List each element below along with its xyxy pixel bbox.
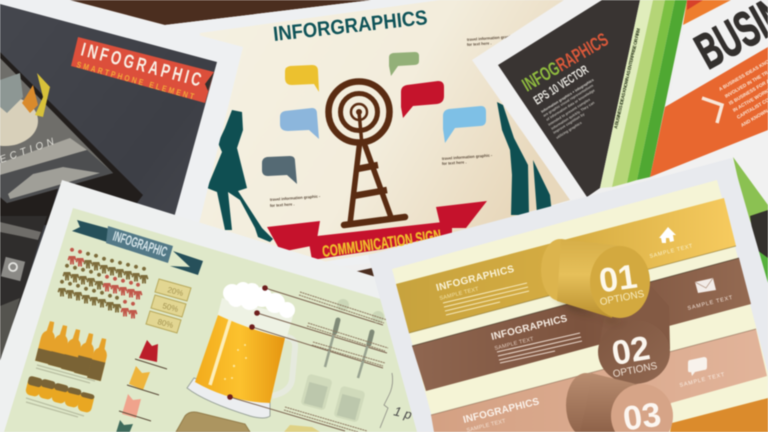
ghost taps and mugs: [300, 299, 384, 423]
panel: dark infographics vector: [472, 0, 687, 200]
callout lines: [230, 288, 387, 431]
band: brown: SAMPLE TEXT: [687, 295, 734, 312]
body text: utilizing graphics: [555, 121, 583, 140]
green corner: [733, 157, 768, 260]
small text blocks: for text here .: [270, 201, 295, 208]
label: collection: ECTION: [0, 135, 59, 166]
mug handle: [272, 337, 295, 396]
body text: information quickly. They can: [550, 101, 595, 131]
brown coaster: [176, 412, 250, 432]
beer mug: [187, 282, 387, 431]
banner: infographic: INFOGRAPHIC: [111, 228, 169, 260]
band: brown: SAMPLE TEXT: [494, 336, 535, 352]
cylinder: 01: 01: [597, 258, 640, 300]
yellow coaster: [284, 425, 320, 432]
percent tags: 20%: [166, 285, 184, 298]
callout dots: [227, 285, 268, 400]
brown table scrap: [353, 268, 375, 279]
brown table top: [70, 0, 372, 25]
percent tags: 50%: [161, 301, 179, 314]
band: yellow: INFOGRAPHICS: [435, 264, 516, 294]
green strips: [600, 0, 687, 188]
cylinder: 02: 02: [609, 329, 653, 373]
cylinder: 01: [541, 239, 650, 322]
small text blocks: for text here .: [467, 40, 492, 47]
page label: 1 p: [392, 403, 413, 422]
badge: infographic smartphone element: SMARTPHONE ELEMENT: [75, 60, 195, 102]
body text: intended to present complex: [547, 98, 591, 127]
small text blocks: for text here .: [442, 159, 467, 166]
band: peach: SAMPLE TEXT: [679, 372, 726, 389]
orange top band: [683, 0, 731, 25]
band: brown: [412, 258, 751, 391]
icon: map pin: [1, 257, 25, 281]
ribbon tags: [115, 340, 167, 432]
silhouette: left woman: [207, 110, 273, 242]
can chart: [25, 376, 95, 413]
band: yellow: [396, 198, 736, 333]
silhouette: right woman: [497, 102, 552, 215]
beer bubbles: [224, 344, 247, 380]
band: peach: INFOGRAPHICS: [462, 396, 541, 426]
badge: infographic smartphone element: [71, 37, 214, 103]
subheading: eps 10 vector: EPS 10 VECTOR: [531, 62, 591, 108]
heading: infographics vector: INFOGRAPHICS: [519, 29, 612, 96]
bracket: [380, 373, 393, 428]
speech bubble: slate: [262, 156, 297, 184]
speech bubble: yellow: [285, 65, 319, 92]
body text: are graphic visual representations: [542, 83, 594, 118]
band: peach: [431, 329, 767, 432]
heading: inforgraphics: INFORGRAPHICS: [272, 6, 429, 46]
phone: [0, 52, 143, 225]
ribbon: communication sign: [267, 201, 487, 261]
small text blocks: travel information graphic -: [270, 193, 321, 202]
banner: infographic: [72, 220, 203, 275]
cylinder: 01: OPTIONS: [599, 289, 646, 308]
badge: infographic smartphone element: INFOGRAPHIC: [79, 39, 203, 91]
phone lower strip: [0, 216, 47, 370]
orange band: [650, 47, 768, 177]
cylinder: 02: [598, 285, 670, 384]
small text blocks: [270, 34, 516, 208]
egg illustration: [0, 96, 38, 146]
speech bubble: red: [401, 81, 444, 118]
cylinder: 03: [566, 373, 673, 432]
panel: beer infographic: [0, 180, 440, 432]
bottle chart: [35, 320, 111, 381]
body text: [540, 78, 596, 140]
band: yellow: SAMPLE TEXT: [439, 286, 480, 302]
small text blocks: travel information graphic: [467, 34, 516, 42]
panel: options infographic: [368, 158, 768, 432]
people rows: [58, 248, 148, 318]
body text: improve cognition by: [552, 112, 585, 135]
panel: business: [650, 0, 768, 300]
icon: chat bubble: [688, 357, 707, 376]
speech bubble: green: [389, 52, 419, 76]
body text: Information graphics + infographics: [540, 78, 595, 114]
speech bubble: sky: [443, 106, 486, 143]
band: brown: INFOGRAPHICS: [490, 313, 569, 343]
icon: envelope: [695, 278, 716, 293]
icon: home: [659, 227, 676, 243]
business text: [718, 55, 768, 129]
callout text lines: [284, 292, 388, 432]
icon: chevron: [702, 98, 722, 123]
body text: of information data or knowledge: [545, 88, 596, 122]
percent tags: 80%: [156, 317, 174, 330]
chart caption lines: [26, 365, 95, 417]
band: yellow: SAMPLE TEXT: [649, 243, 694, 260]
icon: radio tower: [328, 82, 405, 225]
ribbon: communication sign: COMMUNICATION SIGN: [321, 227, 442, 261]
foam: [223, 282, 295, 318]
orange bottom band: [670, 398, 768, 432]
panel: smartphone element: [0, 0, 243, 370]
chart on phone: [8, 167, 100, 199]
cylinder: 02: OPTIONS: [612, 361, 659, 380]
vertical caption: A BUSINESS IDEAS KNOWN AS ENTERPRISE OR FIRM: [613, 28, 641, 129]
percent tags: [146, 279, 191, 333]
small text blocks: travel information graphic -: [442, 152, 493, 161]
speech bubble: blue: [280, 108, 319, 139]
panel: communication sign: [165, 0, 570, 270]
